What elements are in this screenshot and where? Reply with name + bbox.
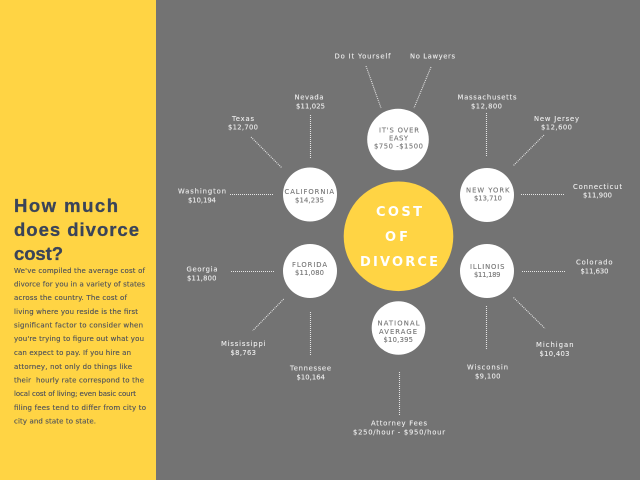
label: georgia	[186, 266, 275, 282]
circle: national average: NATIONAL	[378, 320, 420, 328]
label: texas: $12,700	[228, 124, 258, 132]
text block: introduction: We've compiled the average cost of	[14, 267, 146, 275]
text block: introduction: local cost of living; even basic court	[14, 390, 136, 398]
label: wisconsin	[467, 306, 508, 380]
heading: How much	[14, 195, 118, 216]
circle: illinois: $11,189	[474, 271, 500, 279]
label: do it yourself	[334, 52, 391, 108]
circle: it's over easy: EASY	[389, 134, 409, 142]
label: nevada: $11,025	[296, 102, 325, 110]
label: no lawyers: No Lawyers	[410, 52, 455, 60]
circle: new york	[460, 168, 514, 222]
label: no lawyers	[410, 52, 455, 108]
label: georgia: $11,800	[187, 274, 216, 282]
text block: introduction: attorney, not only do things like	[14, 363, 132, 371]
label: colorado: Colorado	[576, 258, 612, 266]
label: nevada: Nevada	[294, 94, 324, 102]
circle: it's over easy: $750 -$1500	[374, 142, 423, 150]
label: massachusetts	[458, 94, 517, 157]
text block: introduction: you're trying to figure out what you	[14, 335, 144, 343]
label: mississippi: Mississippi	[221, 340, 266, 348]
circle: new york: NEW YORK	[466, 186, 510, 194]
circle: california	[283, 168, 337, 222]
label: georgia: Georgia	[186, 266, 218, 274]
text block: introduction: city and state to state.	[14, 418, 96, 426]
central circle: cost of divorce: DIVORCE	[360, 255, 438, 270]
circle: national average: $10,395	[384, 336, 413, 344]
label: texas: Texas	[231, 115, 254, 123]
circle: national average	[372, 301, 425, 355]
label: attorney fees: Attorney Fees	[371, 420, 427, 428]
circle: florida	[283, 244, 337, 298]
text block: introduction	[14, 267, 146, 426]
label: nevada	[294, 94, 325, 159]
label: colorado	[522, 258, 612, 276]
circle: it's over easy: IT'S OVER	[379, 126, 419, 134]
label: texas	[228, 115, 282, 168]
label: new jersey	[513, 115, 579, 166]
label: washington: $10,194	[188, 196, 216, 204]
label: attorney fees	[353, 372, 445, 436]
label: tennessee	[289, 312, 331, 382]
label: wisconsin: $9,100	[475, 372, 500, 380]
heading: cost?	[14, 243, 63, 264]
label: washington	[178, 188, 274, 204]
label: tennessee: Tennessee	[289, 364, 331, 372]
label: tennessee: $10,164	[296, 374, 325, 382]
label: michigan: $10,403	[540, 350, 570, 358]
label: connecticut	[521, 183, 622, 200]
circle: illinois	[460, 244, 514, 298]
circle: new york: $13,710	[474, 194, 502, 202]
label: mississippi: $8,763	[230, 349, 256, 357]
label: colorado: $11,630	[580, 268, 608, 276]
circle: national average: AVERAGE	[379, 328, 417, 336]
label: massachusetts: $12,800	[471, 102, 502, 110]
text block: introduction: filing fees tend to differ from city to	[14, 404, 146, 412]
circle: california: CALIFORNIA	[284, 188, 334, 196]
label: connecticut: $11,900	[583, 192, 612, 200]
label: attorney fees: $250/hour - $950/hour	[353, 428, 445, 436]
central circle: cost of divorce	[344, 182, 453, 291]
circle: it's over easy	[367, 109, 429, 170]
label: wisconsin: Wisconsin	[467, 364, 508, 372]
label: connecticut: Connecticut	[573, 183, 622, 191]
label: massachusetts: Massachusetts	[458, 94, 517, 102]
label: new jersey: $12,600	[541, 124, 572, 132]
label: new jersey: New Jersey	[534, 115, 579, 123]
text block: introduction: significant factor to consider when	[14, 322, 143, 330]
text block: introduction: across the country. The cost of	[14, 294, 128, 302]
label: michigan	[514, 298, 574, 358]
central circle: cost of divorce: OF	[385, 230, 408, 245]
text block: introduction: divorce for you in a variety of states	[14, 280, 145, 288]
panel: yellow sidebar	[0, 0, 156, 480]
central circle: cost of divorce: COST	[376, 205, 422, 220]
label: michigan: Michigan	[536, 341, 574, 349]
label: do it yourself: Do It Yourself	[334, 52, 391, 60]
text block: introduction: living where you reside is the first	[14, 308, 138, 316]
circle: california: $14,235	[295, 196, 324, 204]
text block: introduction: can expect to pay. If you hire an	[14, 349, 131, 357]
text block: introduction: their hourly rate correspond to the	[14, 376, 144, 384]
heading	[14, 195, 139, 264]
circle: florida: FLORIDA	[292, 261, 327, 269]
label: mississippi	[221, 299, 284, 357]
circle: illinois: ILLINOIS	[470, 263, 504, 271]
circle: florida: $11,080	[295, 269, 324, 277]
label: washington: Washington	[178, 188, 226, 196]
heading: does divorce	[14, 219, 139, 240]
